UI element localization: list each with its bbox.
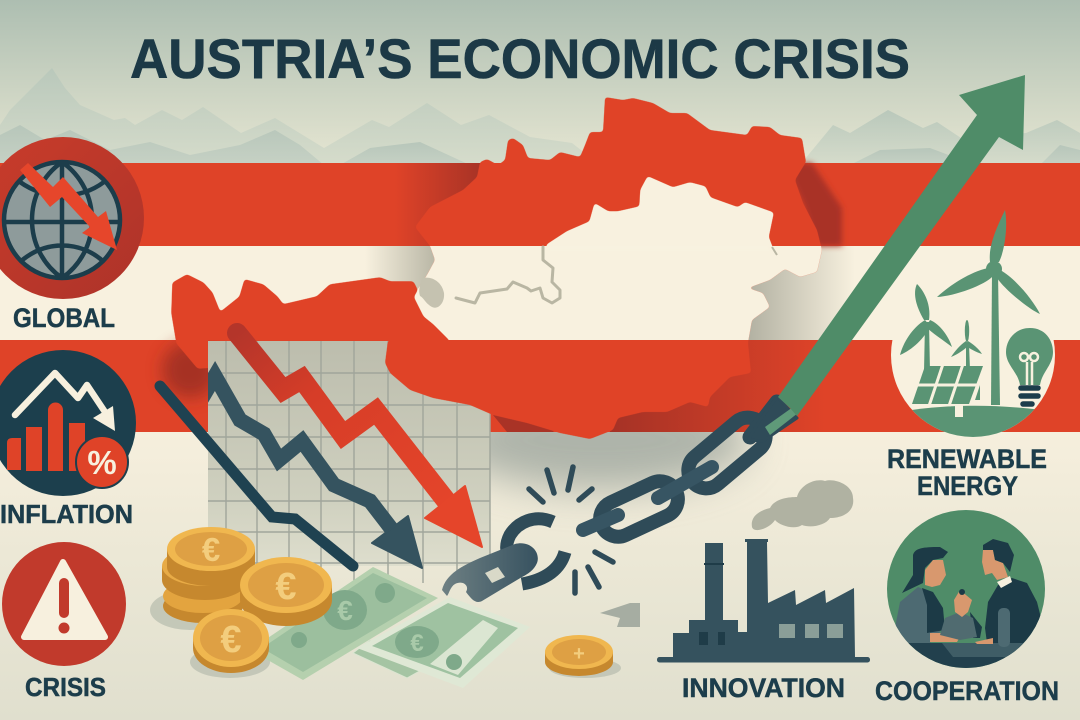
- map: western arm: [172, 275, 452, 368]
- table: [908, 643, 1024, 668]
- front coin: [193, 609, 269, 673]
- map: white central band: [414, 246, 822, 340]
- right coin: €: [275, 566, 297, 608]
- panel: cooperation: [875, 510, 1060, 706]
- gold coins: [162, 527, 613, 676]
- second note: €: [410, 630, 424, 657]
- panel: global: [0, 137, 144, 333]
- shadow on lower band edge: [162, 342, 218, 398]
- disc: [887, 510, 1045, 668]
- label: [887, 444, 1047, 501]
- right coin: [240, 557, 332, 626]
- percent badge: [76, 436, 128, 488]
- bars: [7, 402, 85, 471]
- broken chain: [442, 397, 798, 602]
- solar stand: [955, 404, 963, 417]
- turbines: [900, 210, 1040, 405]
- light bulb: [1006, 328, 1053, 404]
- ring link one: [594, 475, 684, 543]
- inflation disc: [0, 350, 136, 496]
- ground: [912, 406, 1034, 437]
- man: [975, 539, 1041, 647]
- panel: crisis: [2, 542, 126, 702]
- panel: innovation: [657, 480, 870, 703]
- background ground: [0, 432, 1080, 720]
- red down arrow: [20, 163, 117, 250]
- background sky: [0, 0, 1080, 165]
- falling red arrow: [237, 333, 482, 547]
- label: COOPERATION: [875, 676, 1059, 706]
- child: [940, 589, 982, 640]
- exclamation mark: [58, 578, 70, 634]
- label: GLOBAL: [13, 303, 115, 333]
- map: lake shadow: [419, 278, 444, 308]
- spark marks: [529, 467, 613, 593]
- debris: [600, 603, 640, 627]
- percent badge: %: [87, 444, 117, 481]
- solar panel: [912, 364, 983, 406]
- globe: [4, 162, 120, 278]
- coin shadows: [150, 590, 621, 678]
- map: river: [456, 247, 560, 303]
- woman: [893, 547, 962, 643]
- bottom coin: [163, 579, 243, 623]
- second note: [357, 597, 530, 688]
- panel: renewable energy: [880, 210, 1055, 501]
- open link: [507, 519, 565, 584]
- top coin: €: [202, 531, 220, 568]
- map shadow on bands: [365, 163, 855, 432]
- first note: [250, 567, 438, 680]
- chart grid: [208, 341, 490, 583]
- map: upper and lower red area: [385, 97, 822, 439]
- panel: inflation: [0, 350, 136, 529]
- banknotes: [250, 567, 530, 688]
- smoke: [752, 480, 853, 530]
- people: [896, 539, 1040, 668]
- front coin: €: [220, 619, 242, 661]
- label: CRISIS: [25, 672, 106, 702]
- green rising arrow: [778, 75, 1025, 416]
- factory: [657, 539, 870, 662]
- label: INFLATION: [0, 499, 133, 529]
- label: ENERGY: [917, 471, 1018, 501]
- Austria map: [172, 80, 840, 450]
- rod link two: [658, 467, 712, 498]
- first note: €: [337, 595, 353, 626]
- small coin: +: [573, 643, 585, 665]
- white trend arrow: [15, 373, 115, 431]
- flag bands: [0, 163, 1080, 432]
- title: AUSTRIA’S ECONOMIC CRISIS: [130, 27, 910, 90]
- lower note: [353, 640, 425, 678]
- label: INNOVATION: [682, 673, 845, 703]
- ring link two: [681, 410, 773, 496]
- map: white northern bump: [547, 177, 773, 250]
- background mountains: [0, 68, 1080, 165]
- falling dark arrow: [198, 376, 422, 568]
- global icon ring: [0, 137, 144, 299]
- icon backing: [891, 273, 1055, 437]
- middle coin: [162, 546, 248, 600]
- top coin: [167, 527, 255, 586]
- rod link: [583, 515, 618, 530]
- warning triangle: [24, 562, 105, 637]
- chain area shadow: [490, 432, 764, 512]
- crisis disc: [2, 542, 126, 666]
- left link: [442, 543, 538, 602]
- arrow collar: [748, 397, 798, 441]
- label: RENEWABLE: [887, 444, 1047, 474]
- falling dark line: [160, 386, 353, 566]
- small coin: [545, 635, 613, 676]
